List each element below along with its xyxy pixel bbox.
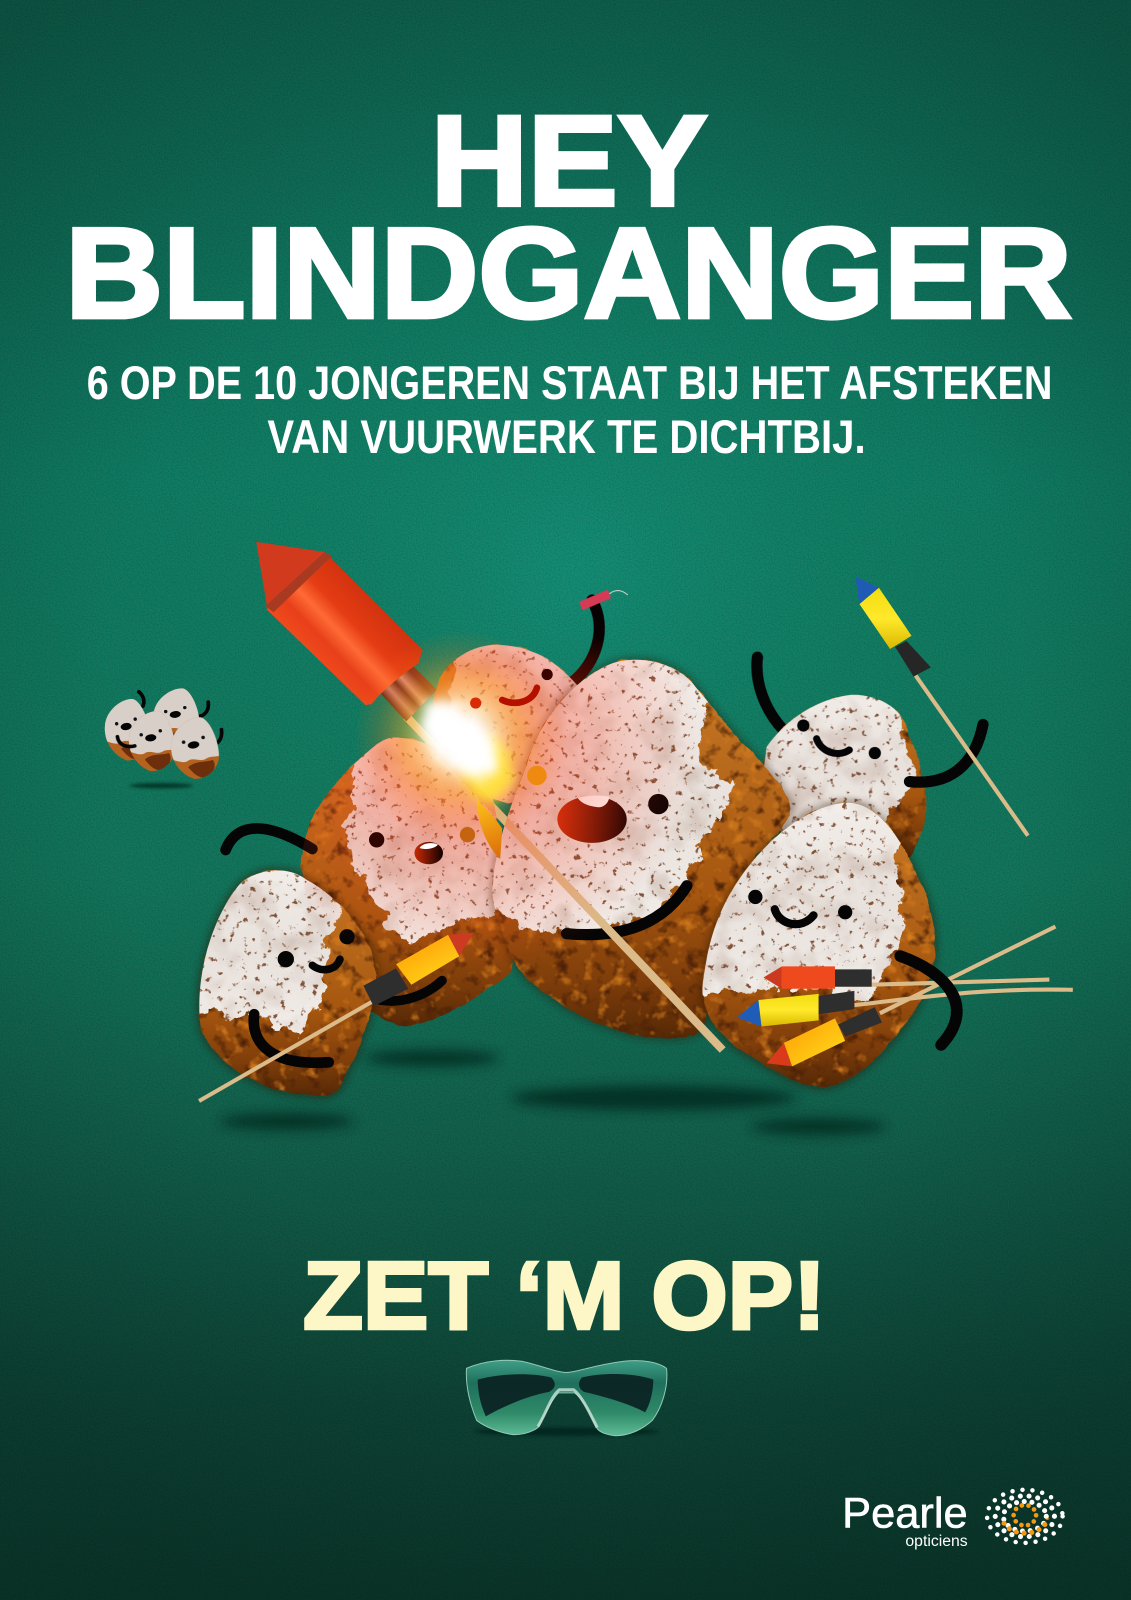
heat tint over oliebollen: [300, 644, 683, 954]
face: back right oliebol: [797, 719, 881, 759]
arm: left of back right oliebol: [757, 657, 784, 731]
arm: back right, right: [909, 724, 983, 782]
arm: front right: [900, 956, 957, 1045]
oliebol: main: [480, 643, 791, 1038]
brand name: Pearle: [842, 1490, 968, 1538]
rocket body: [266, 552, 423, 705]
orange rocket, held: [767, 1007, 882, 1066]
icon: dotted eye: [987, 1490, 1063, 1543]
icon: firecracker: [581, 591, 628, 606]
rocket held by left oliebol: [199, 933, 474, 1101]
rocket stick: [199, 1002, 372, 1101]
subtitle line 2: VAN VUURWERK TE DICHTBIJ.: [267, 411, 866, 463]
subtitle: [87, 357, 1052, 463]
glowing faces near the explosion: [369, 669, 553, 864]
arm: front left, lower: [254, 1014, 329, 1063]
yellow rocket top right: [855, 577, 931, 677]
spark burst: [354, 630, 569, 844]
arm: main oliebol: [567, 886, 687, 935]
call to action: ZET ‘M OP!: [303, 1243, 826, 1350]
rocket nozzle: [363, 968, 408, 1006]
ground shadows: [130, 783, 886, 1135]
logo: Pearle opticiens: [842, 1490, 1063, 1550]
rocket nose cone: [256, 542, 325, 609]
brand sub line: opticiens: [905, 1533, 968, 1550]
title line: BLINDGANGER: BLINDGANGER: [65, 202, 1072, 345]
big red rocket: [256, 542, 437, 721]
arm: lower middle oliebol: [380, 981, 442, 1001]
glasses lens: [466, 1360, 667, 1436]
face: middle left oliebol: [369, 827, 475, 864]
face: top oliebol: [470, 669, 553, 709]
title line: HEY: HEY: [431, 90, 707, 233]
main rocket stick: [406, 716, 723, 1050]
explosion glow: [300, 634, 683, 954]
dark lens reflections: [478, 1374, 653, 1416]
safety glasses: [466, 1360, 667, 1436]
rocket body: [396, 935, 459, 985]
glasses nose pads: [538, 1390, 597, 1428]
oliebol: back right: [764, 694, 927, 858]
oliebol: top behind: [432, 644, 578, 805]
stick of yellow rocket: [916, 676, 1028, 836]
oliebol: middle left: [300, 730, 515, 1026]
sticks bundle at right: [854, 927, 1073, 1013]
rocket nozzle: [374, 659, 437, 721]
face: front right oliebol: [748, 890, 852, 924]
arm: raised, middle left: [226, 828, 312, 850]
arms of the main and left oliebollen: [226, 724, 983, 1063]
face: main oliebol: [557, 794, 669, 843]
rocket tip: [448, 933, 474, 956]
small oliebol group in the distance: [92, 680, 229, 783]
face: front left oliebol: [278, 929, 355, 970]
main oliebol left eye: [527, 766, 547, 785]
arm: behind main oliebol: [477, 799, 502, 859]
title: [65, 90, 1072, 345]
arm holding firecracker: [572, 591, 628, 683]
hot yellow core: [463, 740, 512, 801]
blue tipped rocket, held: [737, 991, 854, 1027]
oliebol: front left: [189, 852, 376, 1096]
red rocket, held: [764, 966, 872, 989]
oliebol: front right: [694, 791, 935, 1087]
